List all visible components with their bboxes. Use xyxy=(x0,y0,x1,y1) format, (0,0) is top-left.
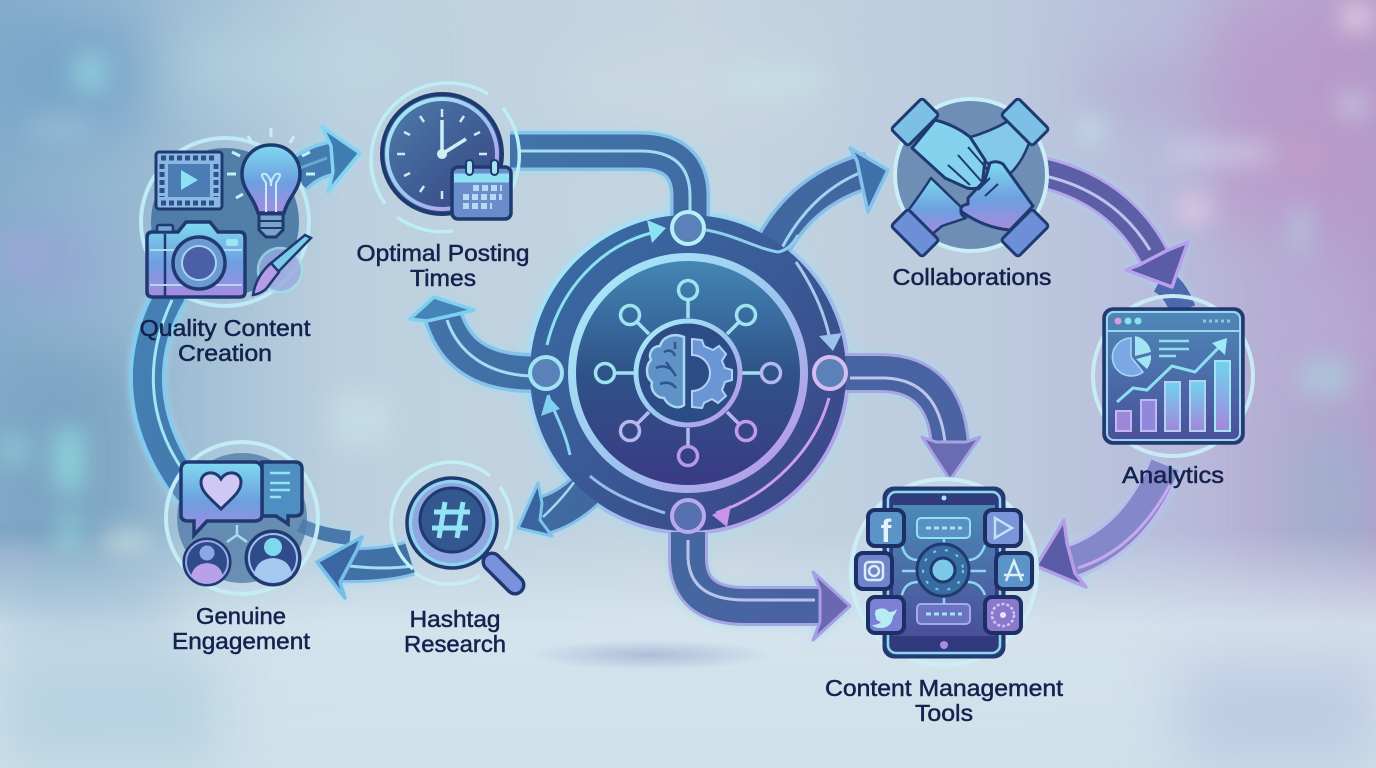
label: genuine engagement: Genuine xyxy=(196,603,286,629)
arrow: collaborations to analytics xyxy=(1040,172,1188,310)
hub brain and gear icon xyxy=(636,321,740,425)
cuffs xyxy=(891,98,1049,257)
label: hashtag research: Hashtag xyxy=(410,606,500,632)
calendar xyxy=(452,160,511,219)
label: quality content creation xyxy=(140,315,311,366)
heart bubble xyxy=(181,462,262,535)
label: content management tools: Tools xyxy=(915,700,973,726)
magnifier handle xyxy=(492,562,515,585)
label: optimal posting times: Optimal Posting xyxy=(356,240,530,266)
arrow: center to hashtag xyxy=(518,450,600,536)
bars and trend line xyxy=(1116,338,1230,431)
arrow: center to content tools right xyxy=(845,373,980,480)
label: analytics: Analytics xyxy=(1122,462,1224,488)
arrow: center to content tools bottom xyxy=(688,532,850,640)
label: hashtag research xyxy=(404,606,506,657)
arrow: quality content to optimal posting times xyxy=(295,127,360,192)
flow arrows xyxy=(147,127,1188,640)
comment bubble xyxy=(262,462,302,524)
icon: hashtag magnifier xyxy=(391,462,515,585)
icon: genuine engagement xyxy=(166,442,318,594)
label: hashtag research: Research xyxy=(404,631,506,657)
icon: content management tablet xyxy=(851,479,1037,665)
settings tile xyxy=(992,604,1014,626)
app store tile xyxy=(1004,561,1024,581)
user avatars xyxy=(184,531,300,585)
label: content management tools xyxy=(825,675,1064,726)
label: quality content creation: Creation xyxy=(178,340,272,366)
pie chart xyxy=(1112,336,1151,376)
arrow: center to optimal posting times left branch xyxy=(410,297,532,376)
hub halo xyxy=(523,208,853,538)
label: content management tools: Content Management xyxy=(825,675,1064,701)
arrow: center to collaborations xyxy=(765,148,888,262)
label: optimal posting times: Times xyxy=(410,265,476,291)
twitter tile xyxy=(872,608,897,628)
film strip xyxy=(156,152,222,209)
play tile xyxy=(995,518,1012,538)
arrow: hashtag to genuine engagement xyxy=(300,525,412,598)
label: genuine engagement: Engagement xyxy=(172,628,311,654)
social app tiles xyxy=(856,510,1032,633)
hub circular flow lines xyxy=(547,230,830,513)
label: optimal posting times xyxy=(356,240,530,291)
facebook tile: f xyxy=(881,513,892,549)
icon: collaborations handshake xyxy=(891,98,1049,257)
hub outer ring xyxy=(530,215,846,531)
ground shadow xyxy=(530,640,770,670)
back hands xyxy=(907,120,1030,236)
central hub xyxy=(530,212,846,532)
instagram tile xyxy=(865,562,883,580)
light bulb xyxy=(227,128,315,237)
arrow: quality content to genuine engagement xyxy=(147,292,190,492)
hub spokes and satellites xyxy=(596,280,780,466)
hub inner disc xyxy=(572,257,804,489)
arrow: analytics to content tools xyxy=(1036,465,1170,587)
arrow: center to optimal posting times xyxy=(510,151,690,222)
icon: clock with calendar xyxy=(371,83,519,232)
label: genuine engagement xyxy=(172,603,311,654)
label: quality content creation: Quality Content xyxy=(140,315,311,341)
front hands xyxy=(912,120,1033,230)
hub connector nodes xyxy=(530,212,846,532)
camera xyxy=(147,222,245,297)
icon: quality content creation xyxy=(141,128,315,306)
label: collaborations: Collaborations xyxy=(892,264,1052,290)
hub flow arrowheads xyxy=(541,220,842,527)
icon: analytics dashboard xyxy=(1093,296,1253,456)
paint brush and palette xyxy=(253,235,311,295)
